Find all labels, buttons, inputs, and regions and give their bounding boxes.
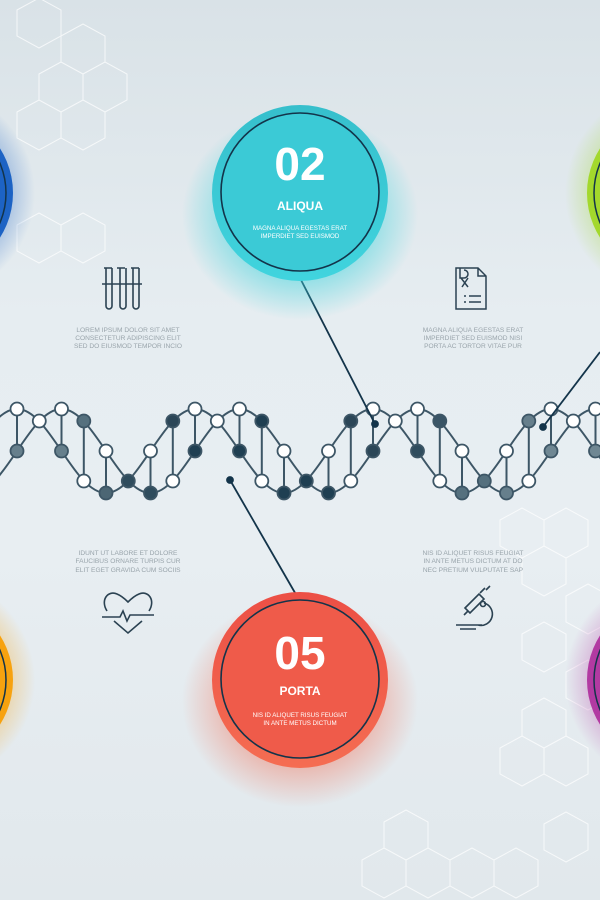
text: top left: SED DO EIUSMOD TEMPOR INCIO (74, 343, 182, 350)
text: bottom right: NEC PRETIUM VULPUTATE SAP (423, 567, 524, 574)
circle 02: ALIQUA (277, 199, 323, 213)
circle 02: IMPERDIET SED EUISMOD (261, 233, 340, 240)
text: top right: IMPERDIET SED EUISMOD NISI (424, 335, 522, 342)
circle 02: 02 (274, 138, 326, 190)
text: bottom left: ELIT EGET GRAVIDA CUM SOCIIS (75, 567, 181, 574)
circle 02: MAGNA ALIQUA EGESTAS ERAT (253, 225, 347, 232)
text: top right: PORTA AC TORTOR VITAE PUR (424, 343, 522, 350)
text: bottom right: NIS ID ALIQUET RISUS FEUGIAT (423, 550, 523, 557)
text: top left: LOREM IPSUM DOLOR SIT AMET (76, 327, 180, 334)
circle 05: PORTA (279, 684, 321, 698)
text: top right: MAGNA ALIQUA EGESTAS ERAT (423, 327, 523, 334)
circle 05: IN ANTE METUS DICTUM (263, 720, 337, 727)
circle 05: 05 (274, 627, 326, 679)
text: bottom left: IDUNT UT LABORE ET DOLORE (79, 550, 178, 557)
circle 05: NIS ID ALIQUET RISUS FEUGIAT (253, 712, 348, 719)
text: top left: CONSECTETUR ADIPISCING ELIT (75, 335, 181, 342)
text: bottom left: FAUCIBUS ORNARE TURPIS CUR (75, 558, 181, 565)
text: bottom right: IN ANTE METUS DICTUM AT DO (423, 558, 523, 565)
